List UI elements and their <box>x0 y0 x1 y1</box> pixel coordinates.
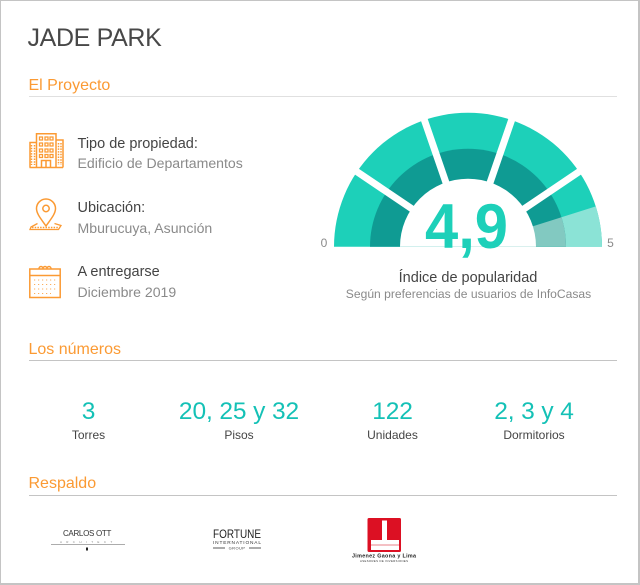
stat: unidades <box>367 398 418 442</box>
inner hole <box>400 179 536 247</box>
icon: calendar <box>29 266 61 298</box>
stat: pisos: Pisos <box>224 428 254 442</box>
logo: Fortune International Group: INTERNATIONAL <box>212 540 261 546</box>
outer pale wedge <box>468 206 602 247</box>
middle ring <box>370 149 566 247</box>
logo: Jimenez Gaona y Lima: Jimenez Gaona y Lima <box>352 554 416 560</box>
text: mburucuya: Mburucuya, Asunción <box>78 220 212 236</box>
outer ring <box>334 113 602 247</box>
stat: dormitorios <box>494 398 574 442</box>
text: tipo de propiedad: Tipo de propiedad: <box>78 136 198 152</box>
gauge max label: 5 <box>607 236 614 250</box>
icon: building <box>29 133 64 168</box>
logo: Carlos Ott <box>51 529 125 550</box>
text: diciembre: Diciembre 2019 <box>78 284 176 300</box>
logo: Carlos Ott: A R C H I T E C T <box>59 540 114 544</box>
text: edificio: Edificio de Departamentos <box>78 155 243 171</box>
heading: Los numeros: Los números <box>28 341 121 358</box>
heading: Respaldo: Respaldo <box>28 475 96 492</box>
logo: Jimenez Gaona y Lima <box>352 518 416 563</box>
text: ubicacion: Ubicación: <box>78 200 145 216</box>
icon: location pin <box>29 198 62 230</box>
stat: pisos <box>179 398 299 442</box>
middle pale wedge <box>468 217 566 247</box>
logo: Fortune International Group: FORTUNE <box>212 527 260 541</box>
popularity gauge chart <box>320 112 614 262</box>
stat: dormitorios: 2, 3 y 4 <box>494 398 574 425</box>
gauge caption: Índice de popularidad <box>399 270 537 286</box>
gauge value: 4,9 <box>424 192 508 262</box>
stat: torres: Torres <box>72 428 105 442</box>
gauge subcaption: Según preferencias de usuarios de InfoCasas <box>346 287 591 301</box>
stat: dormitorios: Dormitorios <box>503 428 565 442</box>
stat: unidades: 122 <box>372 398 413 425</box>
heading: El Proyecto: El Proyecto <box>28 77 110 94</box>
logo: Jimenez Gaona y Lima: ASESORES DE INVERSIONES <box>360 559 408 563</box>
stat: pisos: 20, 25 y 32 <box>179 398 299 425</box>
logo: Carlos Ott: CARLOS OTT <box>62 529 111 538</box>
text: a entregarse: A entregarse <box>78 264 160 280</box>
logo: Fortune International Group: GROUP <box>228 546 245 550</box>
stat: torres <box>72 398 105 442</box>
stat: torres: 3 <box>82 398 95 425</box>
stat: unidades: Unidades <box>367 428 418 442</box>
title: JADE PARK <box>28 24 161 52</box>
gauge min label: 0 <box>320 236 327 250</box>
logo: Fortune International Group <box>212 527 261 550</box>
